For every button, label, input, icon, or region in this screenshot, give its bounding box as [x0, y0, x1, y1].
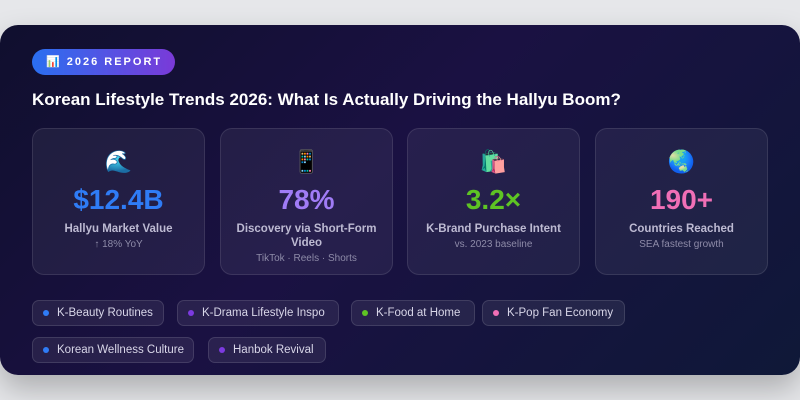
card: market value [32, 128, 205, 275]
pill: K-Beauty: K-Beauty Routines [57, 307, 153, 319]
card: purchase intent: vs. 2023 baseline [455, 239, 532, 250]
pill: Hanbok [208, 337, 326, 363]
card: market value: 🌊 [105, 150, 132, 175]
card: purchase intent: K-Brand Purchase Intent [426, 223, 561, 235]
card: discovery: 78% [278, 184, 335, 215]
title: Korean Lifestyle Trends 2026: What Is Actually Driving the Hallyu Boom? [32, 90, 621, 109]
pill: K-Pop [482, 300, 625, 326]
pill: K-Drama [177, 300, 339, 326]
card: discovery [220, 128, 393, 275]
card: discovery: 📱 [293, 150, 320, 175]
pill: K-Food [351, 300, 475, 326]
card: countries: 190+ [650, 184, 713, 215]
card: discovery: Video [291, 237, 322, 249]
card: countries [595, 128, 768, 275]
badge [32, 49, 175, 75]
pill: Wellness: Korean Wellness Culture [57, 344, 184, 356]
card: market value: $12.4B [73, 184, 164, 215]
pill: K-Food: K-Food at Home [376, 307, 460, 319]
card: market value: ↑ 18% YoY [94, 239, 143, 250]
card: market value: Hallyu Market Value [64, 223, 173, 235]
pill: K-Drama: K-Drama Lifestyle Inspo [202, 307, 325, 319]
card: discovery: TikTok · Reels · Shorts [256, 253, 357, 264]
pill: Wellness [32, 337, 194, 363]
card: countries: Countries Reached [629, 223, 734, 235]
pill: K-Pop: K-Pop Fan Economy [507, 307, 613, 319]
card: countries: SEA fastest growth [639, 239, 724, 250]
pill: Hanbok: Hanbok Revival [233, 344, 314, 356]
card: purchase intent [407, 128, 580, 275]
card: purchase intent: 🛍️ [480, 150, 507, 175]
pill: K-Beauty [32, 300, 164, 326]
badge: 📊 2026 REPORT [46, 56, 162, 68]
card: purchase intent: 3.2× [466, 184, 521, 215]
card: discovery: Discovery via Short-Form [237, 223, 376, 235]
card: countries: 🌏 [668, 150, 695, 175]
